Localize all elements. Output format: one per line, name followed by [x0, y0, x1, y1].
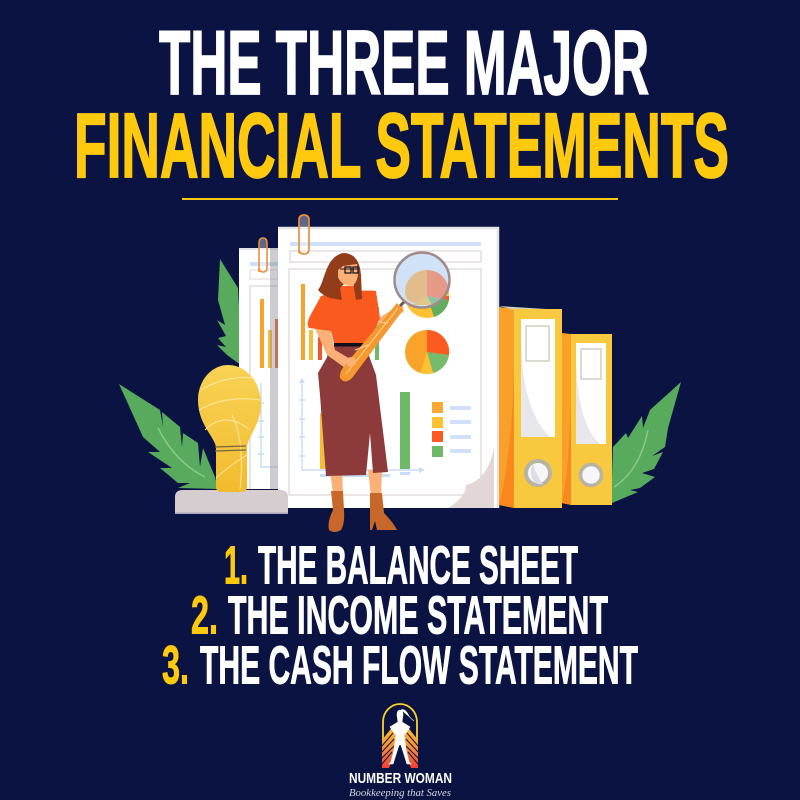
hand	[346, 357, 356, 367]
item 3: 3.	[162, 636, 189, 696]
logo	[349, 704, 452, 799]
light bulb	[198, 365, 261, 492]
logo name: NUMBER WOMAN	[349, 770, 452, 787]
sweater	[308, 286, 380, 343]
statement list	[162, 536, 638, 696]
magnifier handle	[340, 303, 403, 382]
legend	[432, 402, 471, 457]
bar chart	[301, 284, 379, 360]
logo wings	[382, 725, 418, 768]
logo figure	[389, 710, 414, 764]
item 1: 1.	[224, 536, 248, 596]
binder large	[499, 306, 562, 508]
logo tagline: Bookkeeping that Saves	[349, 787, 451, 799]
paperclip front	[299, 215, 309, 254]
legs	[330, 470, 382, 496]
item 2	[191, 586, 608, 646]
left upper leaf	[217, 259, 242, 365]
title	[74, 13, 729, 197]
item 3	[162, 636, 638, 696]
lower chart	[299, 378, 425, 477]
front document page	[278, 227, 499, 508]
page curl	[448, 447, 494, 508]
arms	[314, 304, 404, 370]
binder small	[562, 333, 612, 505]
face	[338, 264, 358, 286]
left lower leaf	[119, 384, 218, 489]
glasses	[340, 268, 358, 270]
item 2: 2.	[191, 586, 218, 646]
magnifying lens	[394, 252, 450, 308]
pie chart lower	[405, 330, 449, 374]
plinth	[175, 490, 288, 514]
item 1	[224, 536, 578, 596]
hair	[318, 253, 362, 300]
logo arch	[383, 704, 417, 768]
illustration	[119, 215, 681, 532]
paperclip back	[259, 238, 267, 272]
back document page	[239, 248, 279, 489]
pie chart upper	[405, 274, 449, 318]
skirt	[318, 345, 388, 476]
woman	[308, 253, 404, 532]
right leaf	[612, 382, 681, 503]
boots	[328, 491, 397, 532]
